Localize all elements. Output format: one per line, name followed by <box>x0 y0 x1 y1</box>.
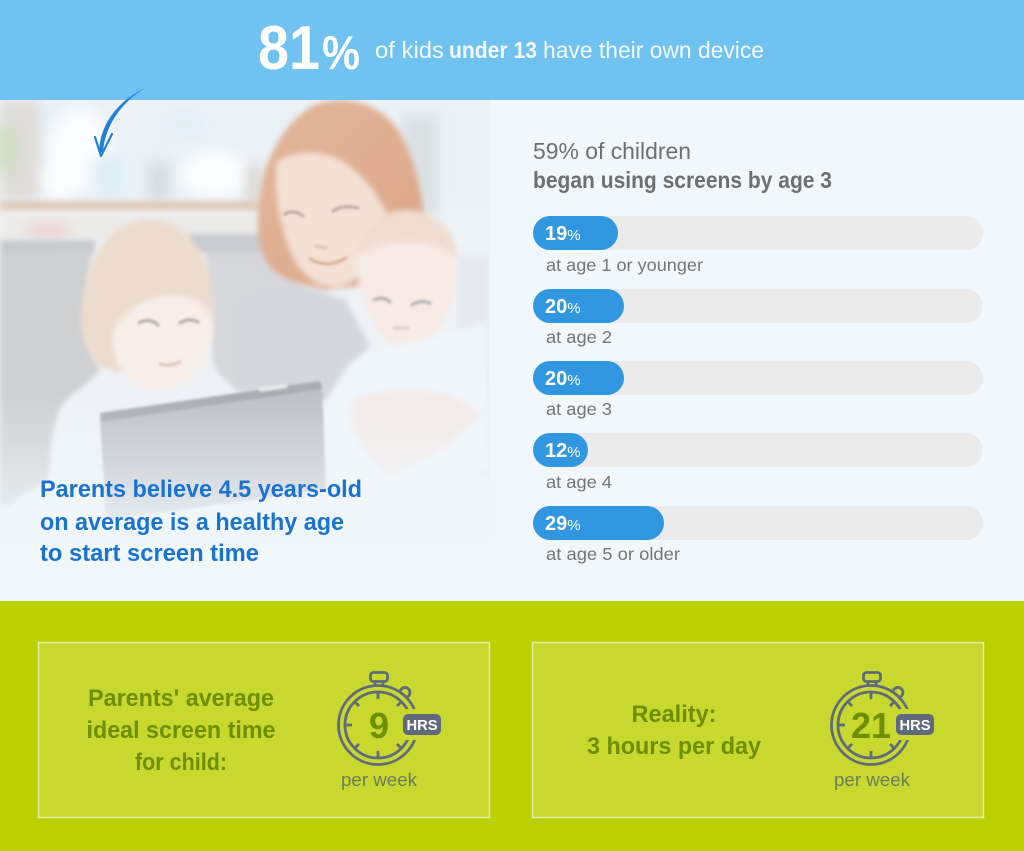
callout: healthy age <box>40 476 362 567</box>
bar: at age 4: 12% <box>545 440 581 462</box>
bar: at age 5 or older <box>533 506 983 564</box>
panel text: ideal screen time <box>86 717 276 744</box>
callout: healthy age: Parents believe 4.5 years-old <box>40 476 362 503</box>
banner text <box>375 37 764 63</box>
bar: at age 4 <box>533 433 983 492</box>
photo: mother and children with tablet <box>0 100 490 519</box>
icon: stopwatch 9 hrs: per week <box>341 770 418 790</box>
bar: at age 5 or older: at age 5 or older <box>546 544 680 564</box>
bar: at age 2: 20% <box>545 296 581 318</box>
face details <box>285 207 358 264</box>
callout: healthy age: to start screen time <box>40 540 259 567</box>
icon: stopwatch 9 hrs <box>338 672 444 790</box>
banner stat: 81% <box>258 14 360 83</box>
tablet <box>100 381 326 520</box>
toddler body <box>50 372 234 454</box>
panel: ideal screen time <box>38 642 490 818</box>
panel text: Reality: <box>632 701 716 728</box>
chart heading: 59% of children <box>533 138 691 164</box>
banner stat: 81%: 81 <box>258 14 320 83</box>
sofa <box>0 240 95 255</box>
banner text: have their own device <box>543 37 764 63</box>
panel: reality <box>532 642 984 818</box>
icon: stopwatch 21 hrs: HRS <box>900 717 930 734</box>
mother hair <box>258 100 424 290</box>
icon: stopwatch 9 hrs: 9 <box>369 705 389 746</box>
banner text: under 13 <box>449 37 537 63</box>
bar: at age 1 or younger: 19% <box>545 223 581 245</box>
bar chart <box>533 216 983 564</box>
toddler face <box>113 295 213 391</box>
mother face <box>276 153 386 287</box>
bottom fade <box>0 413 407 522</box>
bar: at age 2: at age 2 <box>546 327 612 347</box>
callout: healthy age: on average is a healthy age <box>40 509 344 536</box>
bar: at age 4: at age 4 <box>546 472 612 492</box>
panel text: Parents' average <box>88 685 274 712</box>
panel text <box>587 701 762 760</box>
icon: stopwatch 9 hrs: HRS <box>406 717 438 734</box>
panel text: 3 hours per day <box>587 733 762 760</box>
icon: stopwatch 21 hrs: 21 <box>851 705 891 746</box>
chart heading: began using screens by age 3 <box>533 167 832 193</box>
bar: at age 1 or younger: at age 1 or younger <box>546 255 703 275</box>
panel text <box>86 685 276 776</box>
top banner <box>0 0 1024 100</box>
banner text: of kids <box>375 37 444 63</box>
arrow <box>95 88 145 156</box>
bar: at age 1 or younger <box>533 216 983 275</box>
green footer band <box>0 601 1024 851</box>
bar: at age 5 or older: 29% <box>545 513 581 535</box>
panel text: for child: <box>135 749 227 776</box>
chart heading <box>533 138 832 193</box>
bar: at age 3 <box>533 361 983 419</box>
icon: stopwatch 21 hrs: per week <box>834 770 911 790</box>
banner stat: 81%: % <box>322 26 360 79</box>
bar: at age 2 <box>533 289 983 347</box>
baby <box>355 238 458 345</box>
bar: at age 3: at age 3 <box>546 399 612 419</box>
toddler hair <box>82 220 213 372</box>
bar: at age 3: 20% <box>545 368 581 390</box>
icon: stopwatch 21 hrs <box>832 672 937 790</box>
toddler and baby details <box>139 298 430 365</box>
